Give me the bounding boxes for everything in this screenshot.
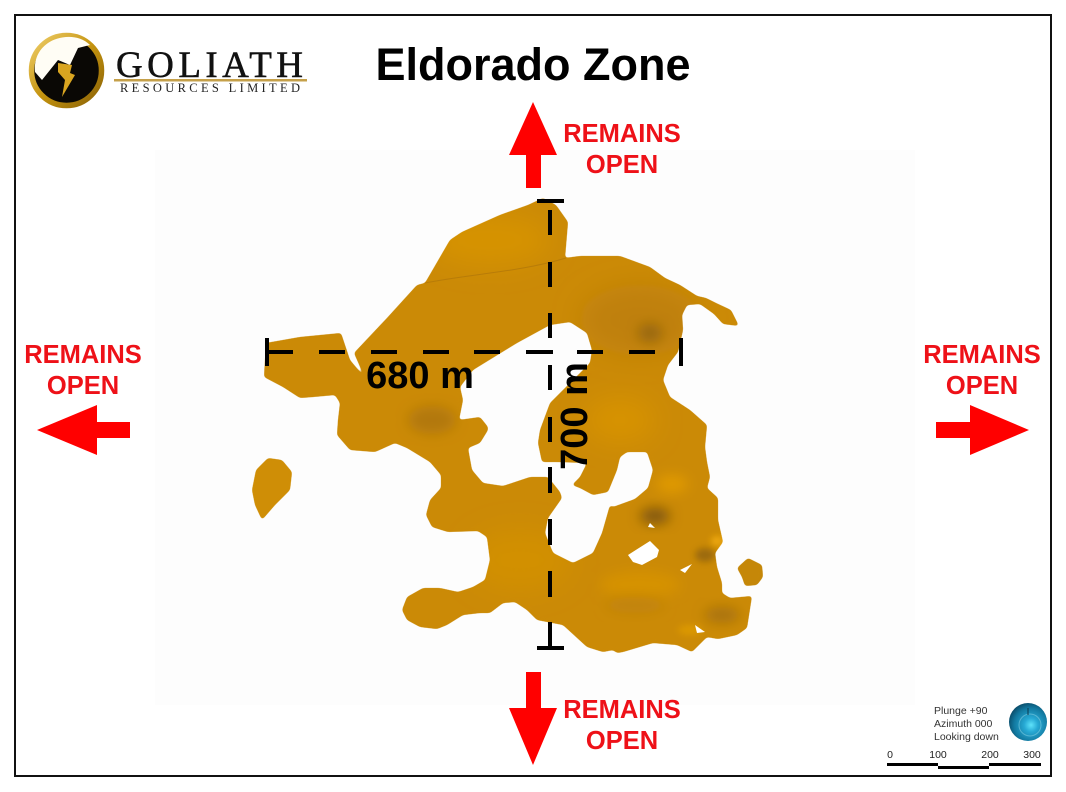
label: remains open left: OPEN xyxy=(47,372,119,400)
scale labels: 300 xyxy=(1023,749,1041,761)
view orientation text: Azimuth 000 xyxy=(934,718,993,730)
model background panel xyxy=(155,150,915,705)
view orientation text: Looking down xyxy=(934,731,999,743)
scale labels: 200 xyxy=(981,749,999,761)
main body xyxy=(250,190,760,660)
scale bar xyxy=(887,749,1041,768)
holes xyxy=(628,523,705,633)
scale labels xyxy=(887,749,1041,761)
dimension line: 700 m xyxy=(537,201,564,648)
label: remains open top: OPEN xyxy=(586,151,658,179)
label: remains open bottom: REMAINS xyxy=(563,696,681,724)
label: 680 m: 680 m xyxy=(366,355,474,397)
view orientation text: Plunge +90 xyxy=(934,705,988,717)
arrow: up xyxy=(509,102,557,188)
wordmark: GOLIATH xyxy=(116,45,303,86)
label: remains open bottom: OPEN xyxy=(586,727,658,755)
icon: mountain and lightning badge xyxy=(32,36,102,106)
label: 700 m: 700 m xyxy=(554,362,596,470)
scale labels: 100 xyxy=(929,749,947,761)
arrow: left xyxy=(37,405,130,455)
label: remains open left: REMAINS xyxy=(24,341,142,369)
gold mineralized zone model xyxy=(250,190,763,660)
right island xyxy=(737,558,763,586)
label: remains open top: REMAINS xyxy=(563,120,681,148)
scale labels: 0 xyxy=(887,749,893,761)
logo: Goliath Resources Limited xyxy=(32,36,307,106)
title: Eldorado Zone xyxy=(376,39,690,90)
scale segments xyxy=(887,763,1041,766)
icon: orientation sphere xyxy=(1009,703,1047,741)
arrow: down xyxy=(509,672,557,765)
left island xyxy=(252,458,292,520)
seam between upper and lower lobes xyxy=(425,258,566,283)
tagline: RESOURCES LIMITED xyxy=(120,81,300,95)
label: remains open right: OPEN xyxy=(946,372,1018,400)
main body and islands xyxy=(250,190,763,660)
dimension line: 680 m xyxy=(267,338,681,366)
arrow: right xyxy=(936,405,1029,455)
label: remains open right: REMAINS xyxy=(923,341,1041,369)
